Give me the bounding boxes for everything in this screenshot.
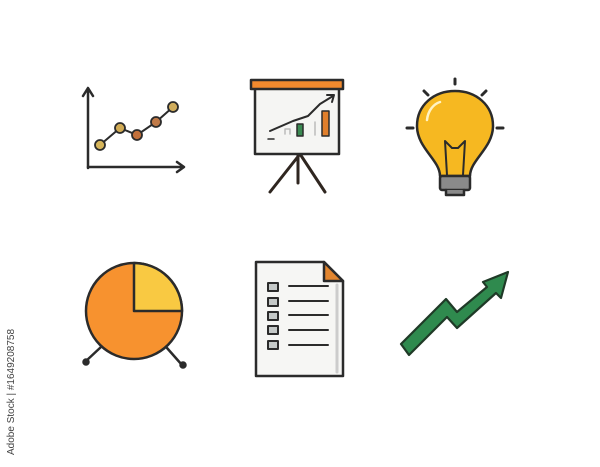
icon: pie chart — [84, 263, 186, 368]
icon: growth arrow — [401, 272, 508, 355]
icon: presentation easel — [251, 80, 343, 192]
watermark id text: Adobe Stock | #1649208758 — [6, 329, 17, 455]
icon: light bulb — [407, 79, 503, 195]
icon: checklist document — [256, 262, 343, 376]
icon: line chart — [83, 88, 184, 172]
